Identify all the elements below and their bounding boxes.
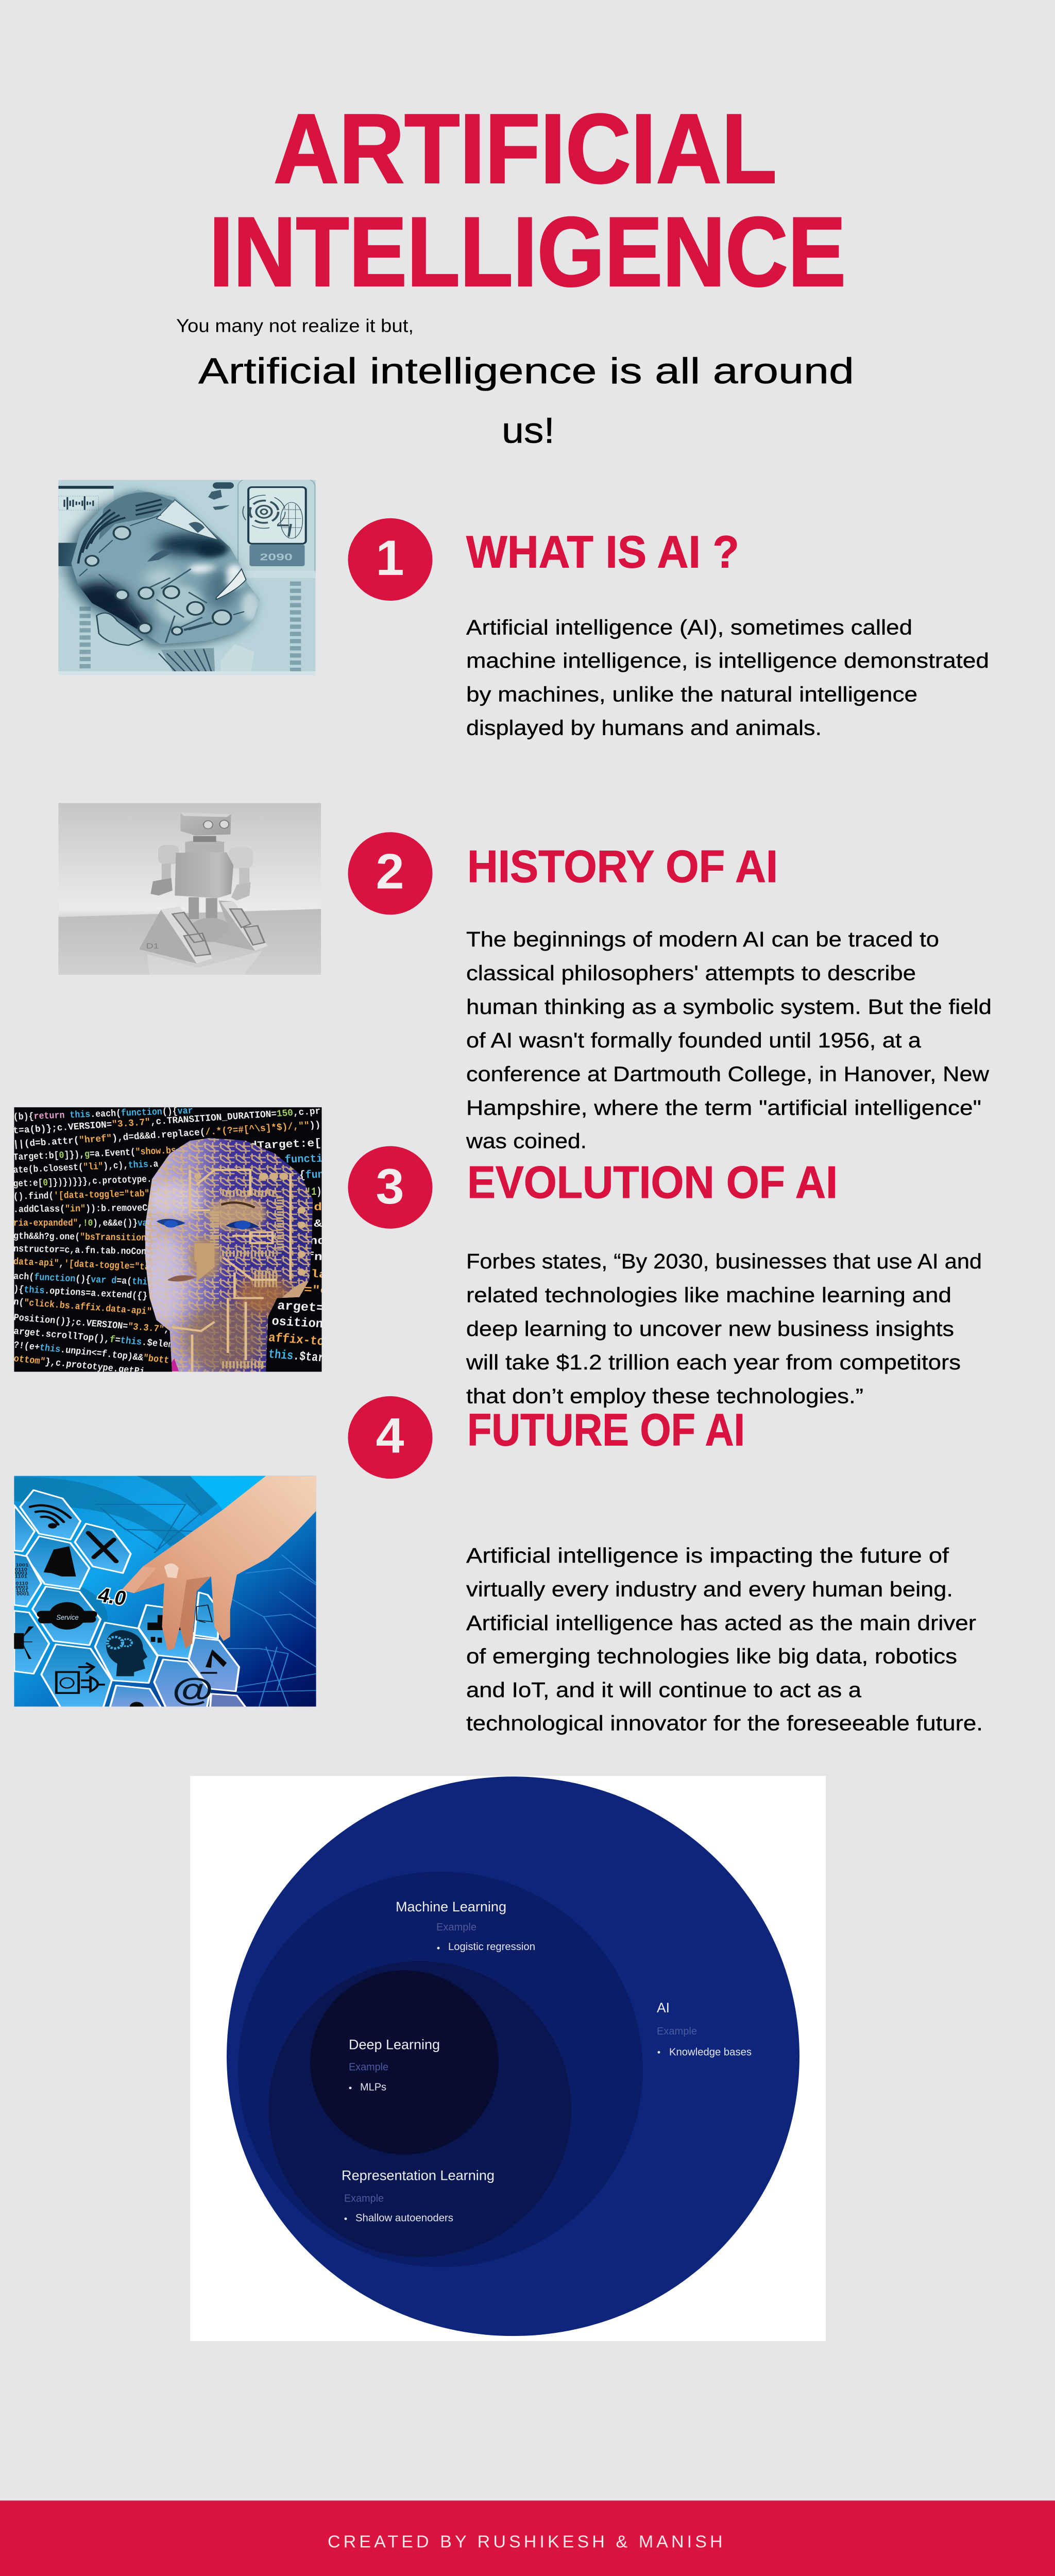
image: circuit face over code: !1) <box>306 1186 322 1198</box>
image: hand touching hexagon icons: 0001 <box>15 1585 29 1590</box>
section 1 body text: Artificial intelligence (AI), sometimes called <box>466 615 912 639</box>
deep learning label: MLPs <box>360 2081 386 2093</box>
section 1 body text <box>466 615 989 740</box>
image: circuit face over code: this.$tar <box>268 1348 325 1366</box>
title: INTELLIGENCE <box>209 197 846 307</box>
image: hand touching hexagon icons <box>14 1476 316 1713</box>
image: circuit face over code: osition <box>271 1315 324 1332</box>
image: circuit face over code: get:e[0]})})}}},c.prototype. <box>13 1174 152 1190</box>
image: circuit face over code: t=a(b)};c.VERSION="3.3.7",c.TRANSITION_DURATION=150,c.pr <box>13 1106 321 1137</box>
deep learning circle <box>310 1970 499 2155</box>
machine learning label: Machine Learning <box>396 1899 506 1914</box>
section 3 body text: related technologies like machine learning and <box>466 1283 951 1307</box>
image: circuit face over code: {fun <box>299 1169 324 1182</box>
image: hand touching hexagon icons: 0001 <box>16 1592 30 1597</box>
representation learning label: Representation Learning <box>342 2168 495 2183</box>
image: hand touching hexagon icons: 0110 <box>15 1567 28 1572</box>
representation learning label: Shallow autoenoders <box>355 2212 453 2224</box>
panel: nested AI diagram <box>190 1776 826 2341</box>
section 4 body text <box>466 1544 983 1735</box>
section 3 body text: will take $1.2 trillion each year from competitors <box>466 1350 961 1374</box>
image: circuit face over code: ottom"},c.prototype.getPi <box>13 1354 145 1378</box>
image: circuit face over code: fn. <box>306 1251 331 1264</box>
image: circuit face over code: dTarget:e[ <box>250 1137 322 1153</box>
image: circuit face over code: arget= <box>277 1299 325 1316</box>
image: circuit face over code: & <box>314 1218 322 1230</box>
subtitle: us! <box>502 411 555 451</box>
section 4 body text: and IoT, and it will continue to act as a <box>466 1677 862 1702</box>
image: circuit face over code: ="c <box>303 1284 329 1297</box>
section 1 number badge <box>348 518 433 601</box>
image: hand touching hexagon icons: 0110 <box>15 1581 28 1586</box>
deep learning label: Deep Learning <box>349 2037 440 2052</box>
section 2 number badge: 2 <box>376 843 404 899</box>
section 3 heading: EVOLUTION OF AI <box>467 1157 838 1208</box>
footer bar <box>0 2501 1055 2576</box>
AI label <box>657 2001 752 2058</box>
AI label: AI <box>657 2001 670 2015</box>
section 4 body text: virtually every industry and every human being. <box>466 1577 953 1601</box>
image: circuit face over code: nd <box>310 1235 326 1248</box>
section 3 body text: Forbes states, “By 2030, businesses that use AI and <box>466 1249 982 1273</box>
image: circuit face over code: Position()};c.VERSION="3.3.7", <box>13 1313 170 1335</box>
section 2 body text: Hampshire, where the term "artificial intelligence" <box>466 1096 981 1120</box>
section 1 number badge: 1 <box>376 530 404 586</box>
title: ARTIFICIAL <box>274 94 777 204</box>
image: circuit face over code: nstructor=c,a.fn.tab.noCon <box>13 1244 146 1258</box>
image: circuit face over code: functi <box>284 1153 323 1166</box>
section 2 body text: of AI wasn't formally founded until 1956, at a <box>466 1028 922 1052</box>
representation learning label: Example <box>344 2193 384 2204</box>
image: circuit face over code: gth&&h?g.one("bsTransition <box>13 1231 146 1244</box>
image: circuit face over code: ria-expanded",!0),e&&e()}va <box>13 1218 147 1229</box>
section 3 number badge <box>348 1146 433 1229</box>
section 1 heading: WHAT IS AI ? <box>466 527 739 577</box>
image: circuit face over code: arget.scrollTop(),f=this.$elem <box>13 1326 174 1351</box>
section 4 body text: Artificial intelligence has acted as the main driver <box>466 1611 976 1635</box>
section 2 body text: The beginnings of modern AI can be traced to <box>466 927 939 951</box>
section 3 body text: that don’t employ these technologies.” <box>466 1384 863 1408</box>
section 2 heading: HISTORY OF AI <box>467 841 778 892</box>
image: toy robot: D1 <box>146 941 159 950</box>
section 4 number badge <box>348 1396 433 1479</box>
deep learning label <box>349 2037 440 2093</box>
footer credit: CREATED BY RUSHIKESH & MANISH <box>328 2532 726 2551</box>
image: circuit face over code: ach(function(){var d=a(thi <box>13 1272 148 1288</box>
subtitle: Artificial intelligence is all around <box>198 351 854 392</box>
section 4 body text: Artificial intelligence is impacting the future of <box>466 1544 949 1567</box>
section 2 body text: human thinking as a symbolic system. But the field <box>466 994 992 1019</box>
image: circuit face over code: d <box>314 1201 322 1214</box>
image: circuit face over code: Target:b[0]}),g=a.Event("show.bs <box>13 1146 177 1163</box>
deep learning label: Example <box>349 2061 388 2073</box>
section 4 heading: FUTURE OF AI <box>467 1404 745 1455</box>
image: circuit face over code: ){this.options=a.extend({} <box>13 1284 148 1302</box>
image: circuit face over code: ?!(e+this.unpin<=f.top)&&"bott <box>13 1340 169 1366</box>
image: hand touching hexagon icons: 1101 <box>15 1574 28 1579</box>
section 2 body text: classical philosophers' attempts to describe <box>466 961 916 985</box>
section 3 body text <box>466 1249 982 1408</box>
image: circuit face over code <box>13 1106 335 1378</box>
image: hand touching hexagon icons: 4.0 <box>95 1583 129 1609</box>
image: hand touching hexagon icons: @ <box>172 1672 213 1707</box>
section 1 body text: displayed by humans and animals. <box>466 716 822 740</box>
image: circuit face over code: affix-to <box>268 1331 325 1349</box>
image: circuit face over code: (b){return this.each(function(){var <box>13 1106 193 1123</box>
section 4 body text: of emerging technologies like big data, robotics <box>466 1644 957 1668</box>
section 1 body text: by machines, unlike the natural intelligence <box>466 682 917 706</box>
section 2 body text: was coined. <box>466 1129 587 1153</box>
representation learning circle <box>268 1961 571 2257</box>
image: circuit face over code: .addClass("in")):b.removeC <box>13 1203 147 1215</box>
section 2 body text <box>466 927 992 1153</box>
image: circuit face over code: ||(d=b.attr("href"),d=d&&d.replace(/.*(?=#[^\s]*$)/,"")) <box>13 1120 321 1150</box>
image: hand touching hexagon icons: 1001 <box>15 1563 29 1568</box>
image: toy robot <box>58 803 321 975</box>
machine learning circle <box>238 1872 643 2267</box>
image: hand touching hexagon icons: 0001 <box>15 1571 28 1576</box>
machine learning label: Example <box>436 1921 477 1933</box>
image: hand touching hexagon icons: Service <box>56 1614 79 1621</box>
image: circuit face over code: lat <box>310 1268 335 1282</box>
machine learning label <box>396 1899 535 1953</box>
intro line: You many not realize it but, <box>176 315 414 336</box>
AI label: Knowledge bases <box>669 2046 752 2058</box>
image: circuit face over code: ate(b.closest("li"),c),this.a <box>13 1159 159 1176</box>
section 3 body text: deep learning to uncover new business insights <box>466 1316 954 1341</box>
title <box>209 94 846 307</box>
image: robot head with clockwork <box>58 479 315 675</box>
AI label: Example <box>657 2025 697 2037</box>
section 3 number badge: 3 <box>376 1158 404 1214</box>
AI circle <box>227 1776 799 2336</box>
section 4 body text: technological innovator for the foreseeable future. <box>466 1711 983 1735</box>
machine learning label: Logistic regression <box>448 1941 535 1953</box>
section 4 number badge: 4 <box>376 1407 404 1463</box>
image: hand touching hexagon icons: 1101 <box>15 1588 28 1593</box>
representation learning label <box>342 2168 495 2224</box>
subtitle <box>198 351 854 451</box>
image: circuit face over code: n("click.bs.affix.data-api" <box>13 1297 152 1317</box>
section 2 body text: conference at Dartmouth College, in Hanover, New <box>466 1062 990 1086</box>
image: circuit face over code: ().find('[data-toggle="tab" <box>13 1189 150 1202</box>
image: circuit face over code: data-api",'[data-toggle="ta <box>13 1257 150 1273</box>
section 2 number badge <box>348 832 433 914</box>
image: robot head with clockwork: 2090 <box>260 551 293 563</box>
section 1 body text: machine intelligence, is intelligence demonstrated <box>466 648 989 672</box>
